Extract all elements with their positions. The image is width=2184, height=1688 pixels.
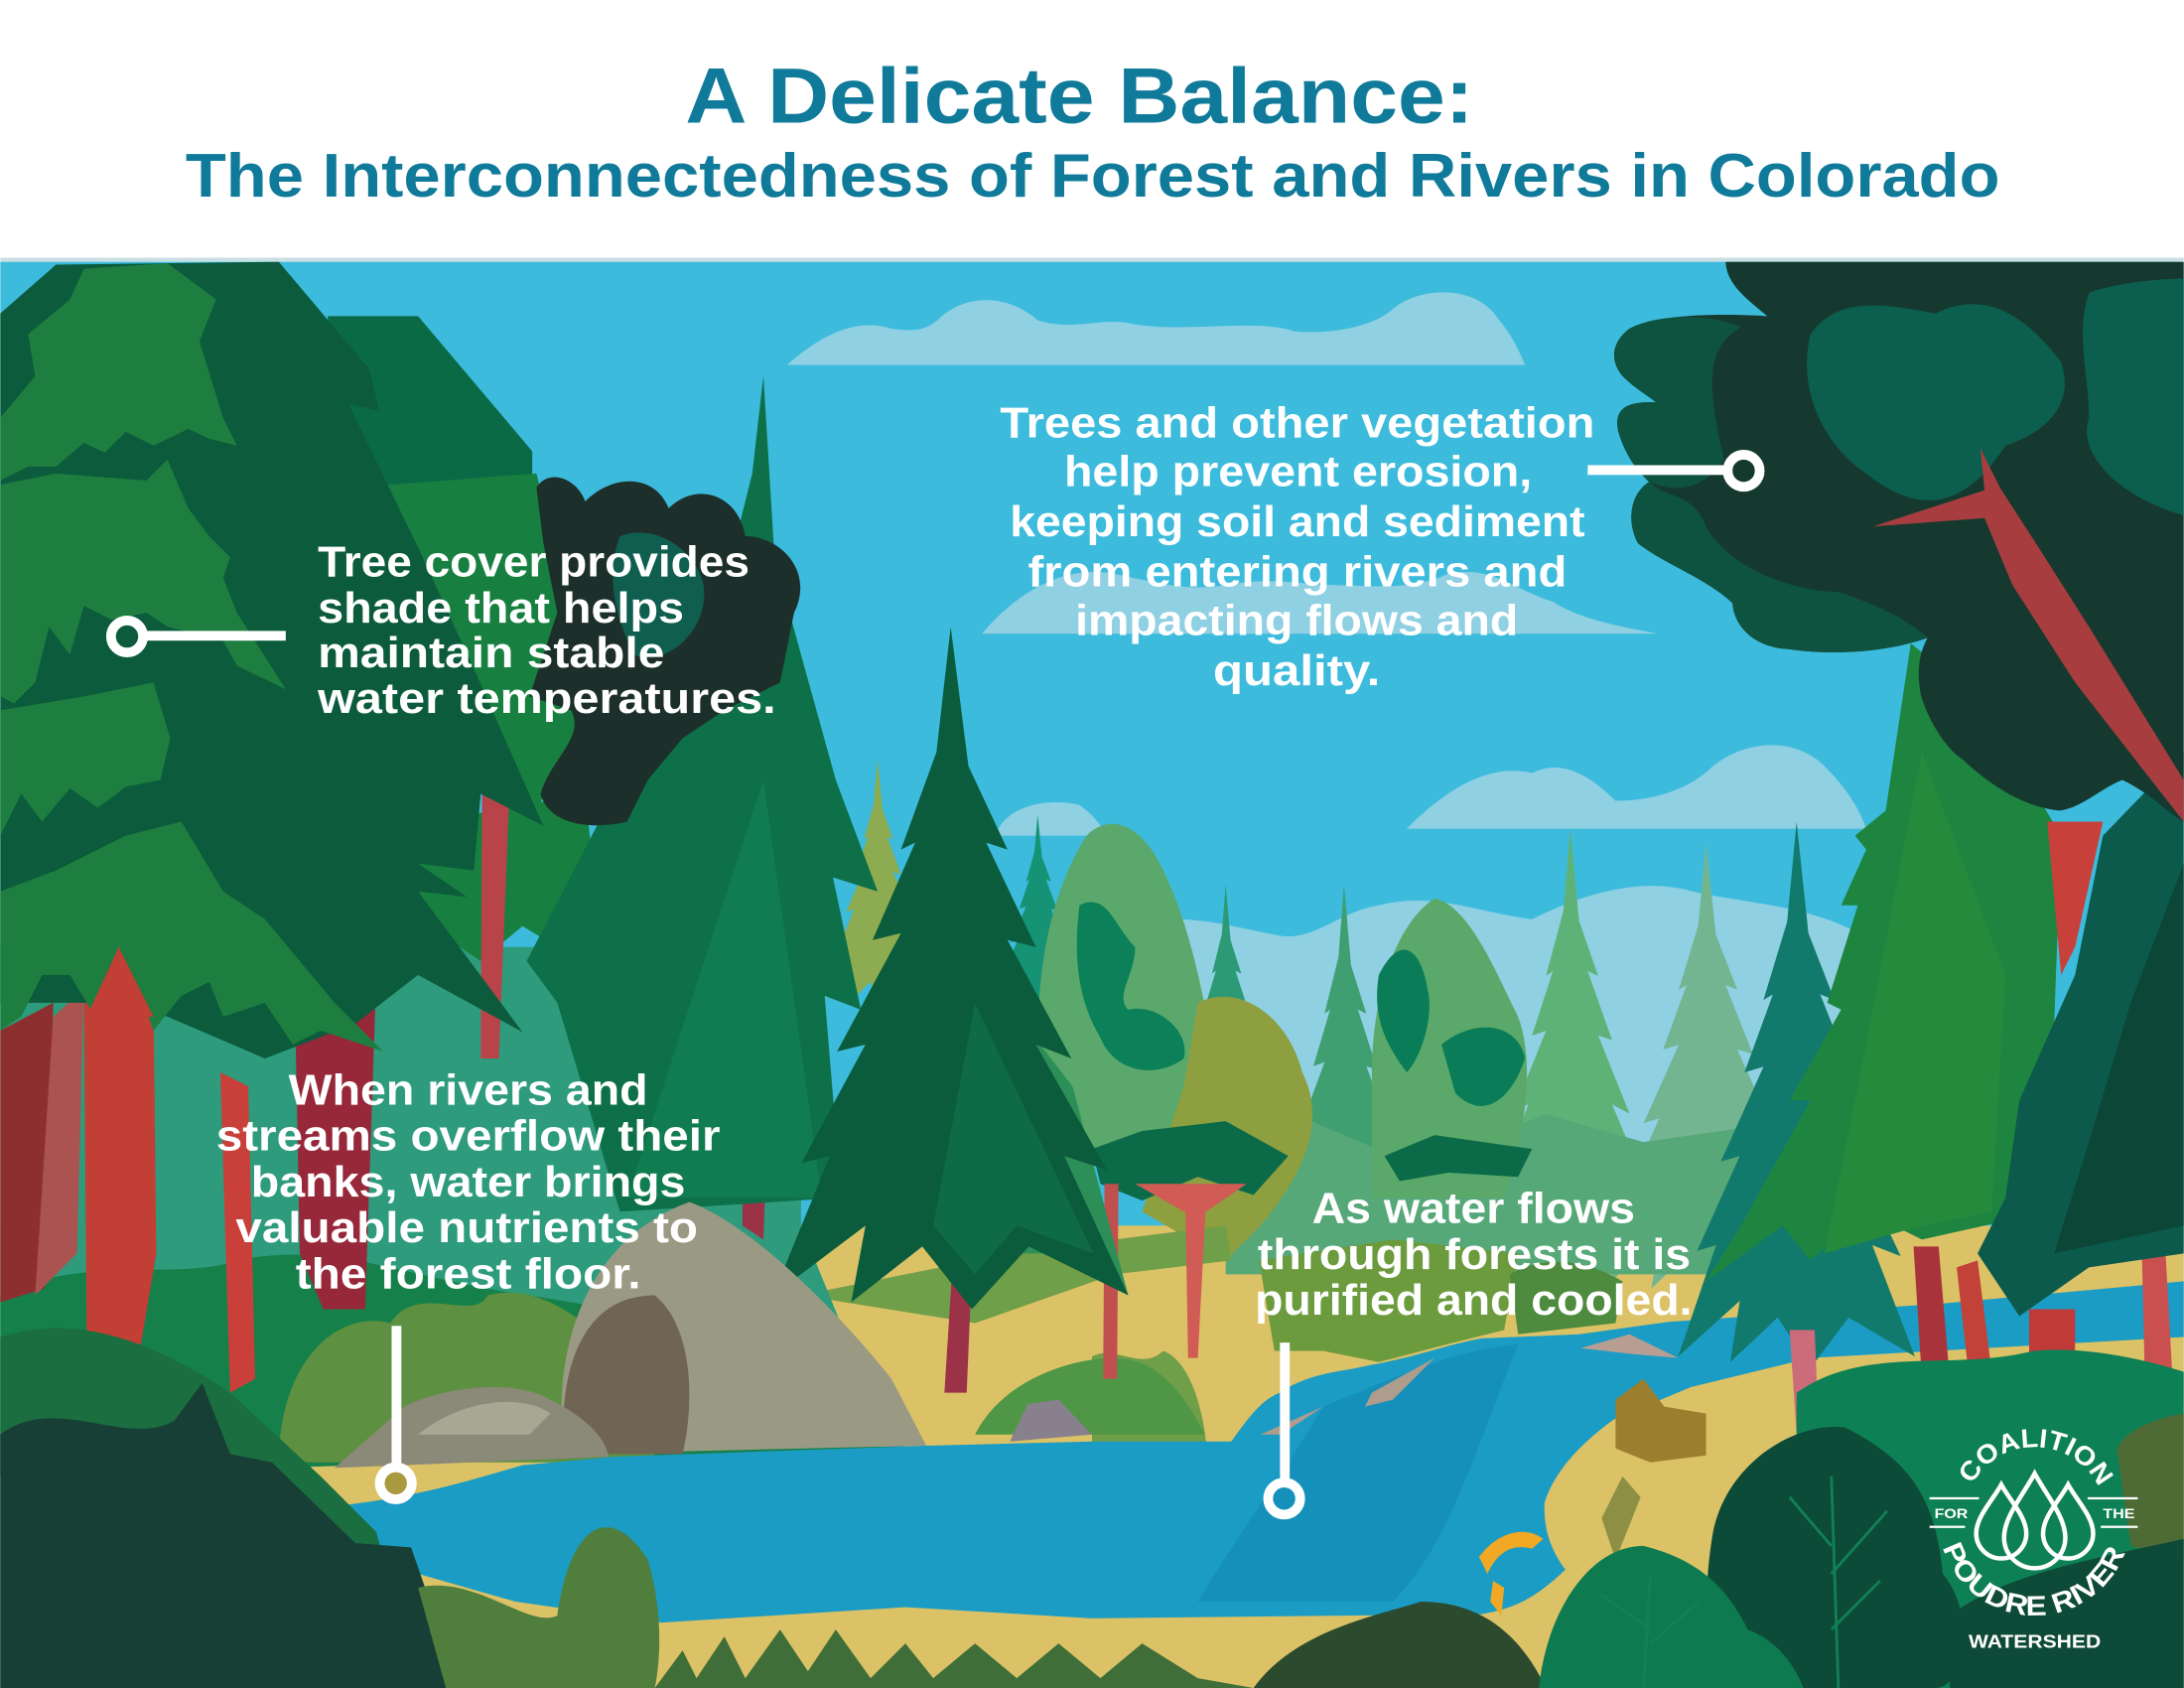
rocks bbox=[335, 1201, 1092, 1468]
distant round tree right bbox=[1372, 899, 1527, 1197]
logo: Coalition for the Poudre River Watershed: FOR bbox=[1935, 1505, 1968, 1521]
text: nutrients: streams overflow their bbox=[216, 1113, 721, 1161]
text: purified bbox=[1255, 1186, 1693, 1325]
logo: Coalition for the Poudre River Watershed bbox=[1930, 1429, 2138, 1651]
text: erosion: Trees and other vegetation bbox=[1000, 399, 1594, 447]
logo: Coalition for the Poudre River Watershed: POUDRE RIVER bbox=[1943, 1541, 2125, 1616]
title bbox=[186, 52, 2000, 211]
clouds bbox=[787, 292, 1880, 1142]
connector: tree cover bbox=[111, 621, 286, 652]
right river bank bbox=[1601, 1379, 1706, 1560]
text: purified: As water flows bbox=[1312, 1186, 1635, 1233]
text: purified: through forests it is bbox=[1258, 1231, 1691, 1279]
text: tree cover: water temperatures. bbox=[317, 675, 776, 723]
text: nutrients: When rivers and bbox=[289, 1066, 648, 1114]
far right dark spruce bbox=[1978, 752, 2184, 1316]
text: erosion: help prevent erosion, bbox=[1064, 449, 1532, 496]
text: erosion bbox=[1000, 399, 1594, 695]
right large spruce bbox=[1706, 643, 2061, 1281]
title: The Interconnectedness of Forest and Rivers in Colorado bbox=[186, 142, 2000, 211]
text: purified: purified and cooled. bbox=[1255, 1277, 1693, 1325]
logo: Coalition for the Poudre River Watershed: THE bbox=[2103, 1505, 2135, 1521]
header band bbox=[0, 0, 2184, 262]
center spruce bbox=[773, 627, 1128, 1309]
bottom shrubs bbox=[418, 1527, 1546, 1688]
trunks bbox=[0, 779, 1247, 1435]
connector: purified bbox=[1268, 1342, 1300, 1514]
text: nutrients: the forest floor. bbox=[296, 1250, 641, 1298]
distant round tree left bbox=[1037, 824, 1226, 1170]
text: erosion: keeping soil and sediment bbox=[1010, 498, 1585, 546]
callout: nutrients bbox=[216, 1066, 721, 1499]
left background forest bbox=[0, 794, 905, 1477]
callout: erosion bbox=[1000, 399, 1760, 695]
connector: nutrients bbox=[380, 1326, 412, 1499]
text: nutrients bbox=[216, 1066, 721, 1298]
text: erosion: impacting flows and bbox=[1075, 598, 1518, 645]
logo: Coalition for the Poudre River Watershed: WATERSHED bbox=[1969, 1630, 2101, 1651]
tall middle spruce bbox=[527, 376, 878, 1211]
text: tree cover: maintain stable bbox=[318, 630, 664, 677]
distant trees bbox=[829, 759, 1804, 1293]
top right dark canopy bbox=[1614, 262, 2184, 822]
text: nutrients: banks, water brings bbox=[251, 1159, 685, 1206]
callout: tree cover bbox=[111, 539, 776, 723]
text: erosion: from entering rivers and bbox=[1027, 549, 1567, 597]
connector: erosion bbox=[1587, 455, 1760, 487]
foreground bottom left bbox=[0, 1328, 460, 1688]
text: tree cover bbox=[317, 539, 776, 723]
text: tree cover: Tree cover provides bbox=[318, 539, 750, 587]
river bbox=[339, 1281, 2184, 1622]
right mid spruce bbox=[1679, 822, 1915, 1367]
dark canopy behind text bbox=[529, 478, 800, 825]
forest floor shrubs bbox=[801, 1121, 1622, 1443]
text: tree cover: shade that helps bbox=[318, 585, 684, 633]
text: nutrients: valuable nutrients to bbox=[235, 1204, 698, 1252]
ground base bbox=[0, 1225, 2184, 1688]
title: A Delicate Balance: bbox=[685, 52, 1473, 139]
foreground bushes right bbox=[1539, 1349, 2184, 1688]
right red trunks bbox=[1790, 822, 2172, 1435]
logo: Coalition for the Poudre River Watershed: COALITION bbox=[1960, 1429, 2114, 1485]
text: erosion: quality. bbox=[1213, 647, 1380, 695]
callout: purified bbox=[1255, 1186, 1693, 1514]
big left tree bbox=[0, 262, 585, 1058]
